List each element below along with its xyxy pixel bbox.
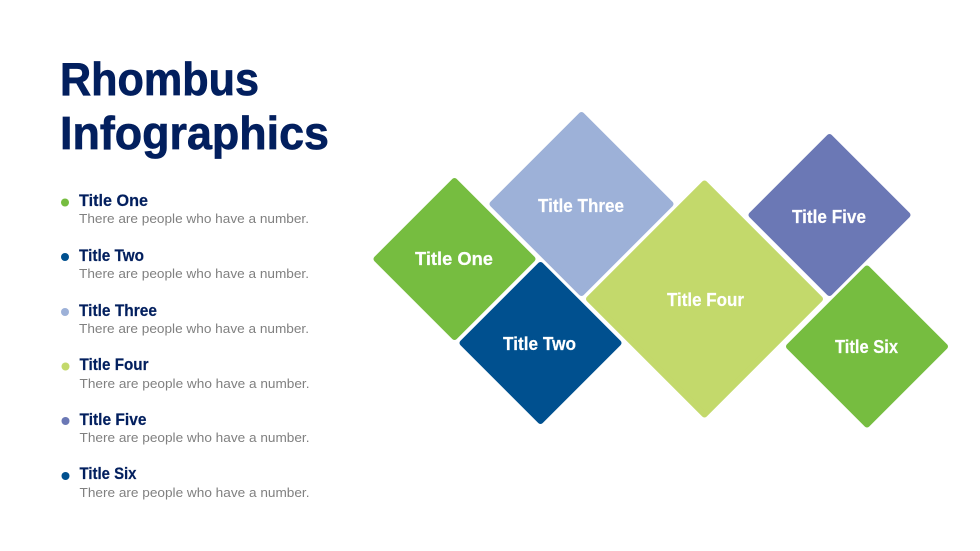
legend item: Title Two: There are people who have a number. (79, 266, 309, 281)
title: Rhombus (60, 53, 259, 105)
rhombus: Title One (376, 181, 532, 337)
legend item: Title Four: Title Four (80, 356, 149, 374)
legend item: Title One: Title One (79, 192, 148, 210)
legend item: Title Five: There are people who have a number. (80, 430, 310, 445)
rhombus: Title Two: Title Two (503, 333, 576, 354)
rhombus: Title Two (462, 265, 618, 421)
rhombus: Title Four (589, 184, 820, 414)
legend list (61, 192, 310, 500)
legend item: Title Two: Title Two (79, 247, 144, 265)
legend item: Title Three: Title Three (79, 302, 157, 320)
legend item: Title One: There are people who have a number. (79, 211, 309, 226)
title: Infographics (60, 107, 329, 159)
legend item: Title Five: Title Five (80, 411, 146, 429)
rhombus: Title One: Title One (415, 248, 493, 269)
legend item: Title Five (62, 411, 310, 445)
legend item: Title Six: There are people who have a number. (80, 485, 310, 500)
rhombus cluster (376, 115, 945, 424)
legend item: Title Four: There are people who have a number. (80, 376, 310, 391)
legend item: Title Six: Title Six (80, 465, 137, 483)
title (60, 53, 329, 159)
legend item: Title Three (61, 302, 309, 336)
legend item: Title Four (62, 356, 310, 391)
rhombus: Title Five (752, 137, 908, 293)
legend item: Title One (61, 192, 309, 226)
legend item: Title Three: There are people who have a number. (79, 321, 309, 336)
rhombus: Title Six: Title Six (835, 336, 899, 357)
rhombus: Title Three: Title Three (538, 195, 624, 216)
legend item: Title Six (62, 465, 310, 500)
rhombus: Title Five: Title Five (792, 206, 866, 227)
rhombus: Title Four: Title Four (667, 289, 744, 310)
rhombus: Title Three (492, 115, 670, 293)
rhombus: Title Six (789, 268, 945, 424)
legend item: Title Two (61, 247, 309, 281)
